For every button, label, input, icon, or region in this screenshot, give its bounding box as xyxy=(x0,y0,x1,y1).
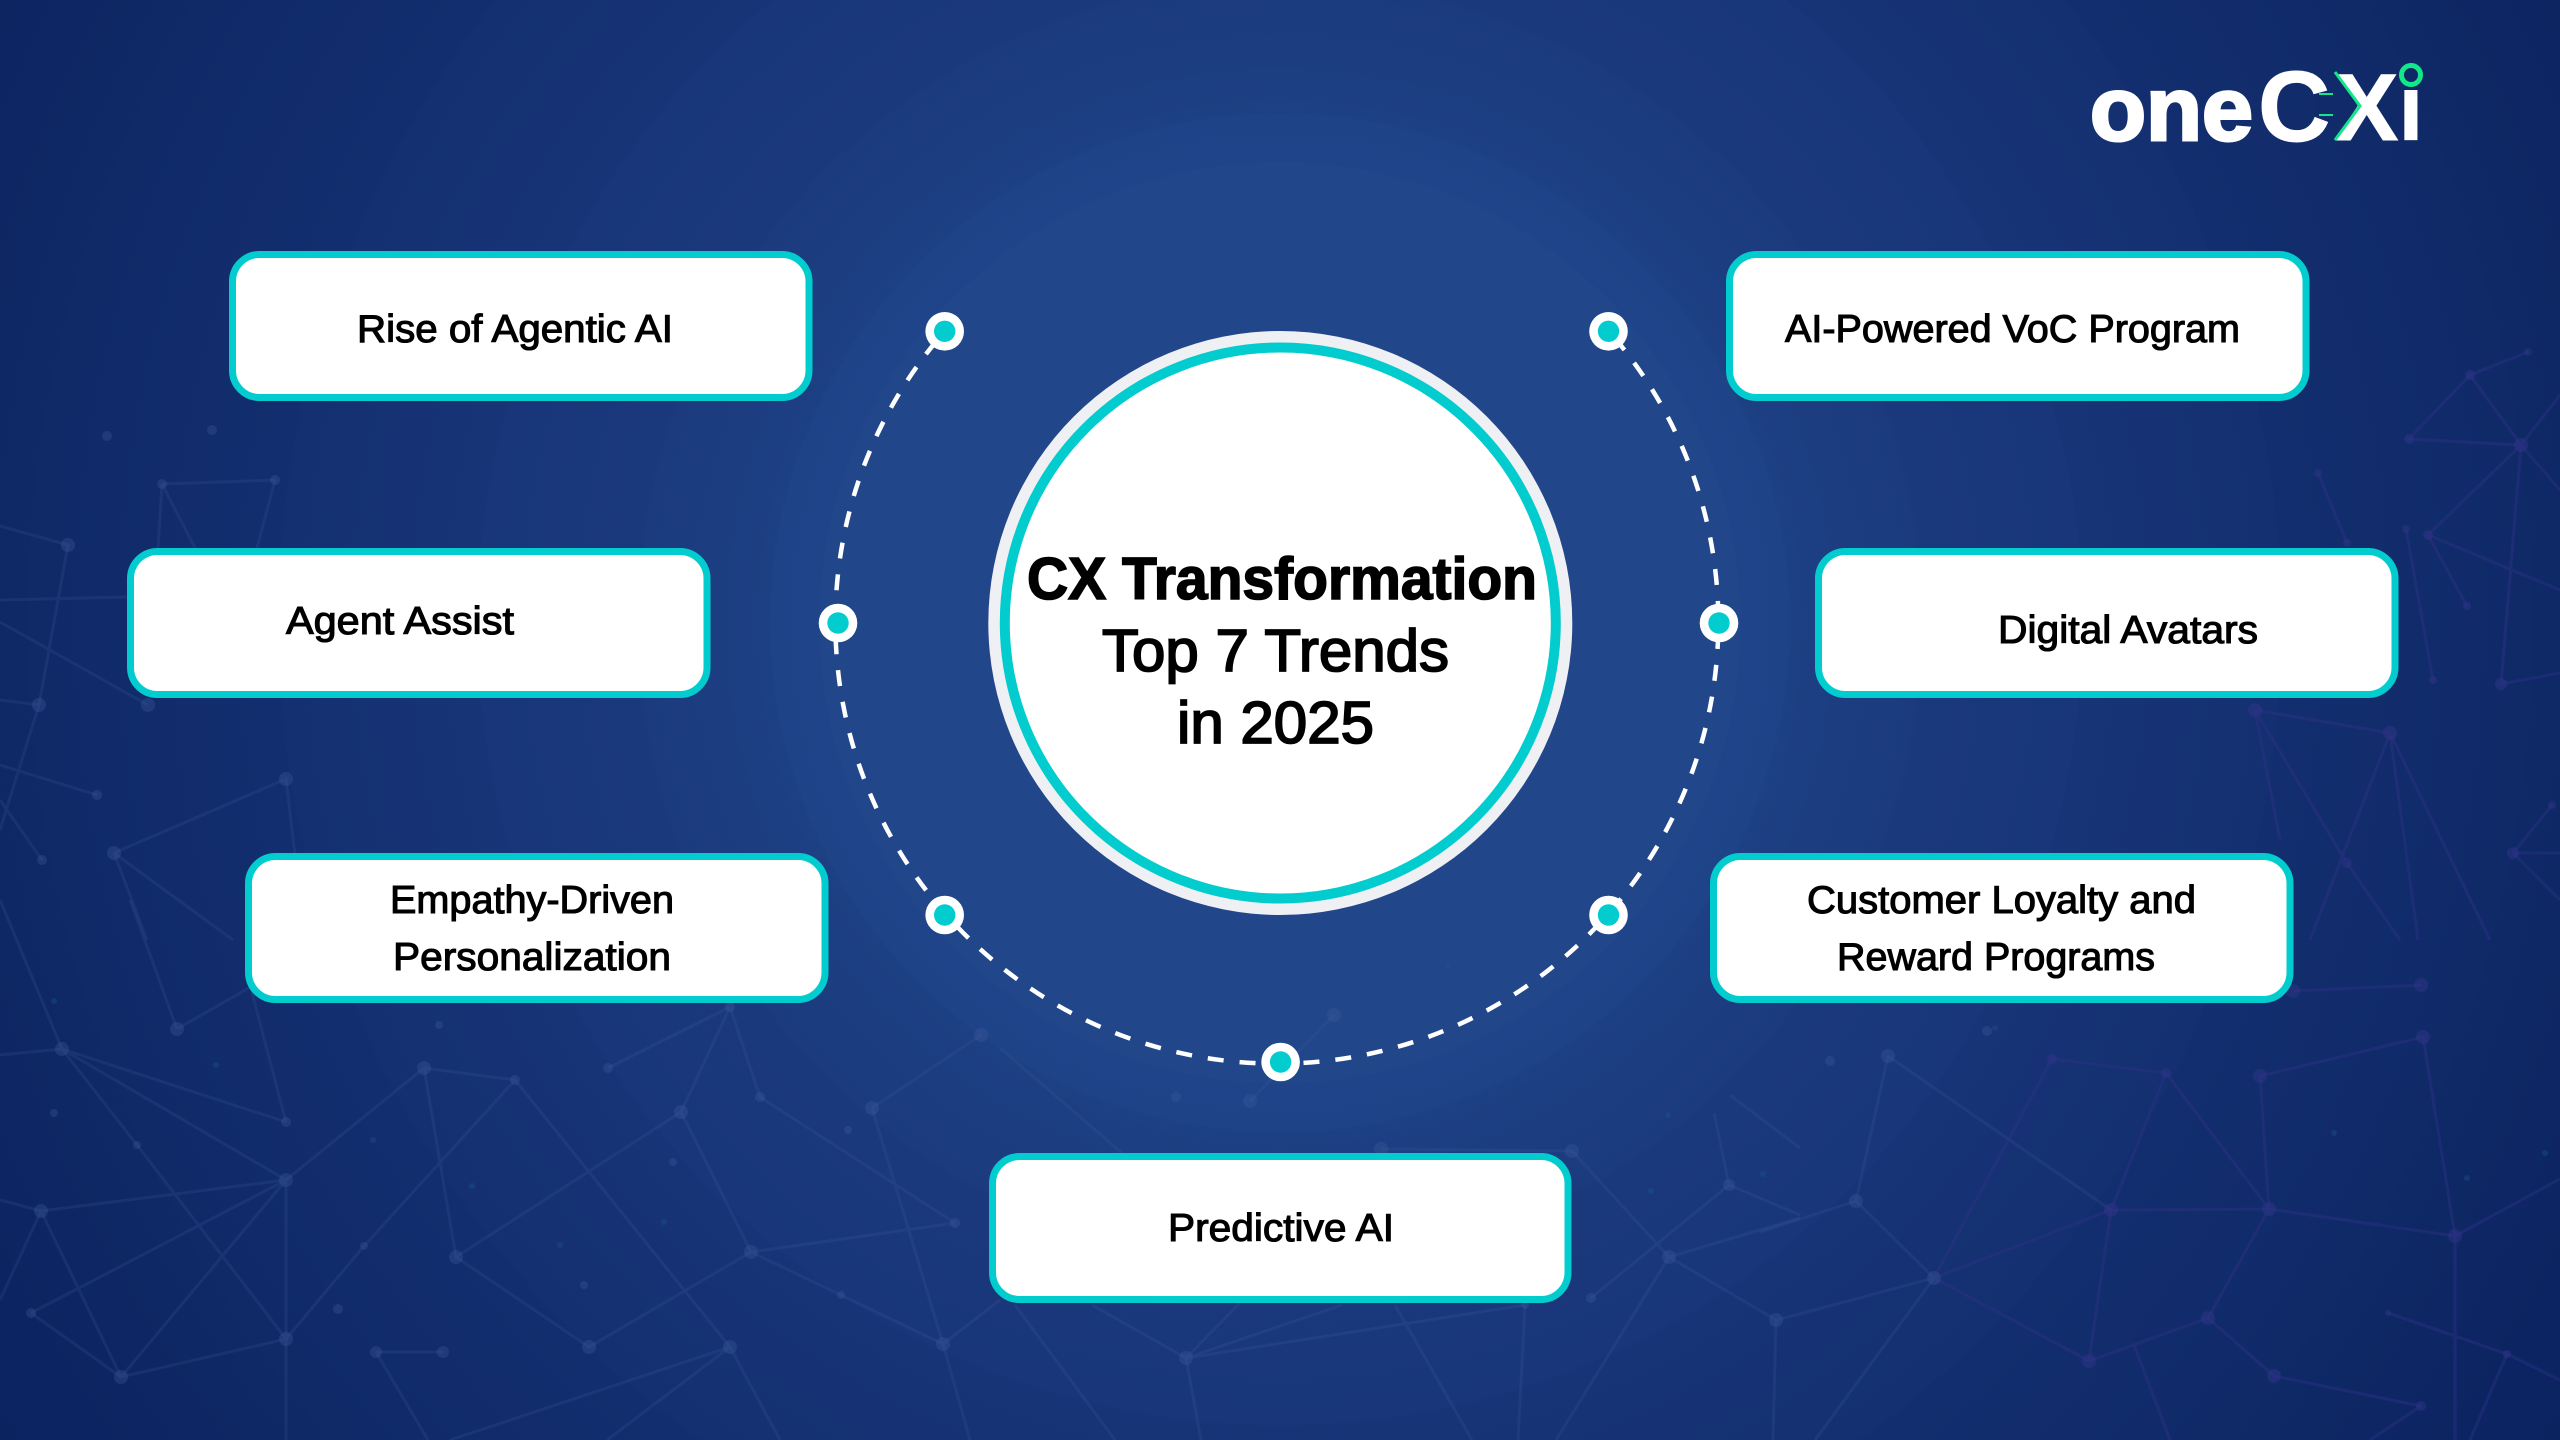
logo: oneCXi: C xyxy=(2258,51,2330,163)
card: Customer Loyalty and Reward Programs: Reward Programs xyxy=(1837,936,2155,979)
card: Rise of Agentic AI xyxy=(232,254,809,398)
card: Predictive AI xyxy=(992,1156,1568,1300)
card: Empathy-Driven Personalization: Empathy-Driven xyxy=(390,879,674,922)
card: Rise of Agentic AI: Rise of Agentic AI xyxy=(357,308,673,351)
card: AI-Powered VoC Program: AI-Powered VoC Program xyxy=(1785,308,2240,351)
connector dot: left xyxy=(819,604,857,642)
card: Customer Loyalty and Reward Programs: Customer Loyalty and xyxy=(1807,879,2196,922)
connector dot: bottom left xyxy=(925,896,964,934)
connector dot: bottom xyxy=(1261,1043,1300,1081)
logo: oneCXi: X xyxy=(2335,55,2398,161)
connector dot: top left xyxy=(925,312,964,351)
card: Predictive AI: Predictive AI xyxy=(1168,1207,1394,1250)
card: Digital Avatars xyxy=(1818,552,2395,694)
card: Agent Assist xyxy=(130,552,707,694)
logo: oneCXi: i xyxy=(2398,55,2424,161)
connector dot: bottom right xyxy=(1589,896,1628,934)
card: AI-Powered VoC Program xyxy=(1730,254,2306,398)
background network pattern xyxy=(0,348,2560,1440)
card: Agent Assist: Agent Assist xyxy=(286,600,514,643)
title text: in 2025 xyxy=(1177,690,1374,756)
connector dot: top right xyxy=(1589,312,1628,351)
centre circle xyxy=(988,331,1572,915)
dashed arc connector xyxy=(835,331,1718,1064)
logo: oneCXi xyxy=(2090,51,2424,163)
card: Empathy-Driven Personalization: Personalization xyxy=(393,936,671,979)
card: Digital Avatars: Digital Avatars xyxy=(1998,609,2258,652)
title text: CX Transformation xyxy=(1027,546,1537,612)
connector dot: right xyxy=(1700,604,1738,642)
card: Customer Loyalty and Reward Programs xyxy=(1714,856,2290,1000)
logo: oneCXi: one xyxy=(2090,60,2253,160)
card: Empathy-Driven Personalization xyxy=(248,856,825,1000)
title text: Top 7 Trends xyxy=(1102,618,1449,684)
title text xyxy=(1027,546,1537,756)
